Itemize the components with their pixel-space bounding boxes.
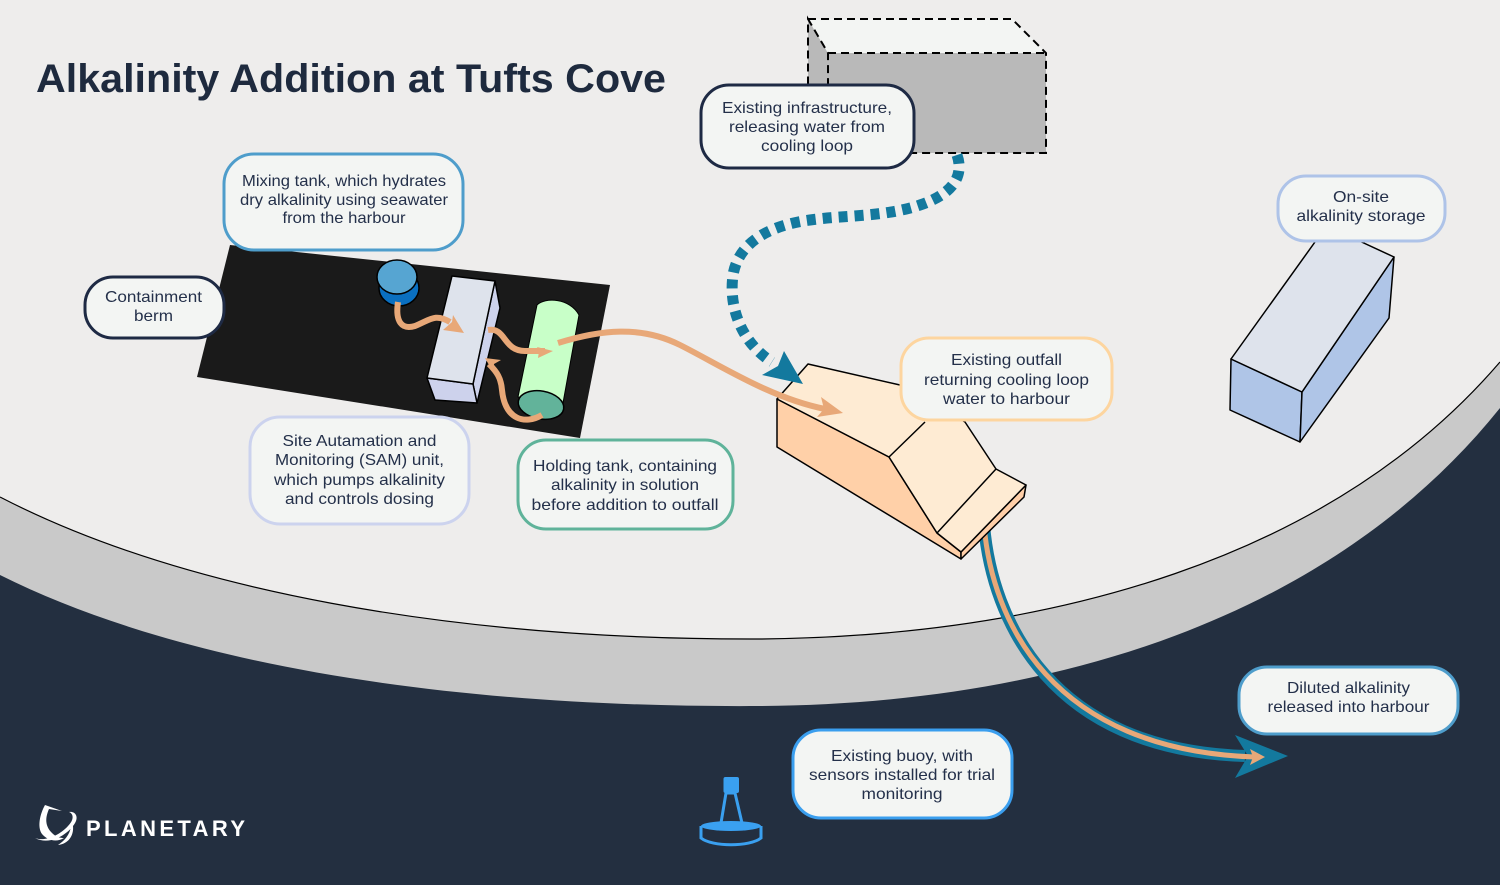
mixing tank — [377, 260, 419, 306]
callout: SAM unit: Site Autamation and — [282, 433, 436, 450]
callout: existing buoy — [793, 730, 1012, 818]
callout: SAM unit: Monitoring (SAM) unit, — [275, 452, 444, 469]
callout: diluted alkalinity: released into harbour — [1268, 699, 1430, 716]
flow arrow: mixing tank to SAM unit — [397, 302, 464, 333]
site automation and monitoring unit — [427, 276, 500, 403]
callout: holding tank: before addition to outfall — [532, 497, 718, 514]
existing outfall structure — [777, 364, 1026, 559]
callout: diluted alkalinity: Diluted alkalinity — [1287, 680, 1410, 697]
callout: on-site storage: alkalinity storage — [1296, 208, 1426, 225]
callout: mixing tank: Mixing tank, which hydrates — [242, 173, 446, 190]
logo mark — [35, 805, 77, 845]
flow arrow: holding tank to SAM unit — [485, 358, 542, 420]
buoy icon — [701, 777, 761, 845]
callout: existing outfall: water to harbour — [942, 391, 1071, 408]
logo — [35, 805, 245, 845]
title: Alkalinity Addition at Tufts Cove — [36, 57, 666, 101]
callout: existing buoy: monitoring — [862, 786, 942, 803]
callout: existing buoy: sensors installed for trial — [809, 767, 995, 784]
existing infrastructure building — [808, 18, 1046, 154]
callout: containment berm: Containment — [105, 289, 203, 306]
dotted flow arrowhead — [762, 351, 803, 384]
callout: on-site storage — [1278, 176, 1445, 241]
callout: existing outfall — [901, 338, 1112, 420]
callout: existing infrastructure — [701, 85, 914, 168]
callout: SAM unit: and controls dosing — [285, 491, 434, 508]
callout: existing outfall: returning cooling loop — [924, 372, 1089, 389]
callout: holding tank: alkalinity in solution — [551, 477, 699, 494]
holding tank — [516, 300, 579, 423]
callout: existing infrastructure: Existing infrastructure, — [722, 100, 892, 117]
on-site alkalinity storage — [1230, 232, 1394, 442]
callout: existing outfall: Existing outfall — [951, 352, 1062, 369]
diluted alkalinity discharge arrow — [984, 525, 1288, 778]
callout: holding tank: Holding tank, containing — [533, 458, 717, 475]
containment berm — [197, 245, 610, 438]
logo wordmark: PLANETARY — [86, 816, 245, 841]
land surface — [0, 0, 1500, 639]
shoreline edge — [0, 362, 1500, 639]
shore wall — [0, 355, 1500, 706]
callout: existing infrastructure: cooling loop — [761, 138, 853, 155]
callout: diluted alkalinity — [1239, 667, 1458, 734]
callout: SAM unit: which pumps alkalinity — [273, 472, 445, 489]
callout: mixing tank — [224, 154, 463, 250]
callout: existing infrastructure: releasing water from — [729, 119, 885, 136]
callout: existing buoy: Existing buoy, with — [831, 748, 973, 765]
callout: mixing tank: dry alkalinity using seawater — [240, 192, 449, 209]
callout: mixing tank: from the harbour — [282, 210, 406, 227]
callout: holding tank — [518, 440, 733, 529]
callout: containment berm — [85, 277, 224, 338]
callout: SAM unit — [250, 417, 469, 524]
dotted cooling water flow path — [732, 155, 959, 362]
callout: containment berm: berm — [134, 308, 173, 325]
callout: on-site storage: On-site — [1333, 189, 1389, 206]
flow arrow: SAM unit to holding tank — [488, 330, 553, 358]
flow arrow: holding tank to outfall — [558, 332, 843, 417]
